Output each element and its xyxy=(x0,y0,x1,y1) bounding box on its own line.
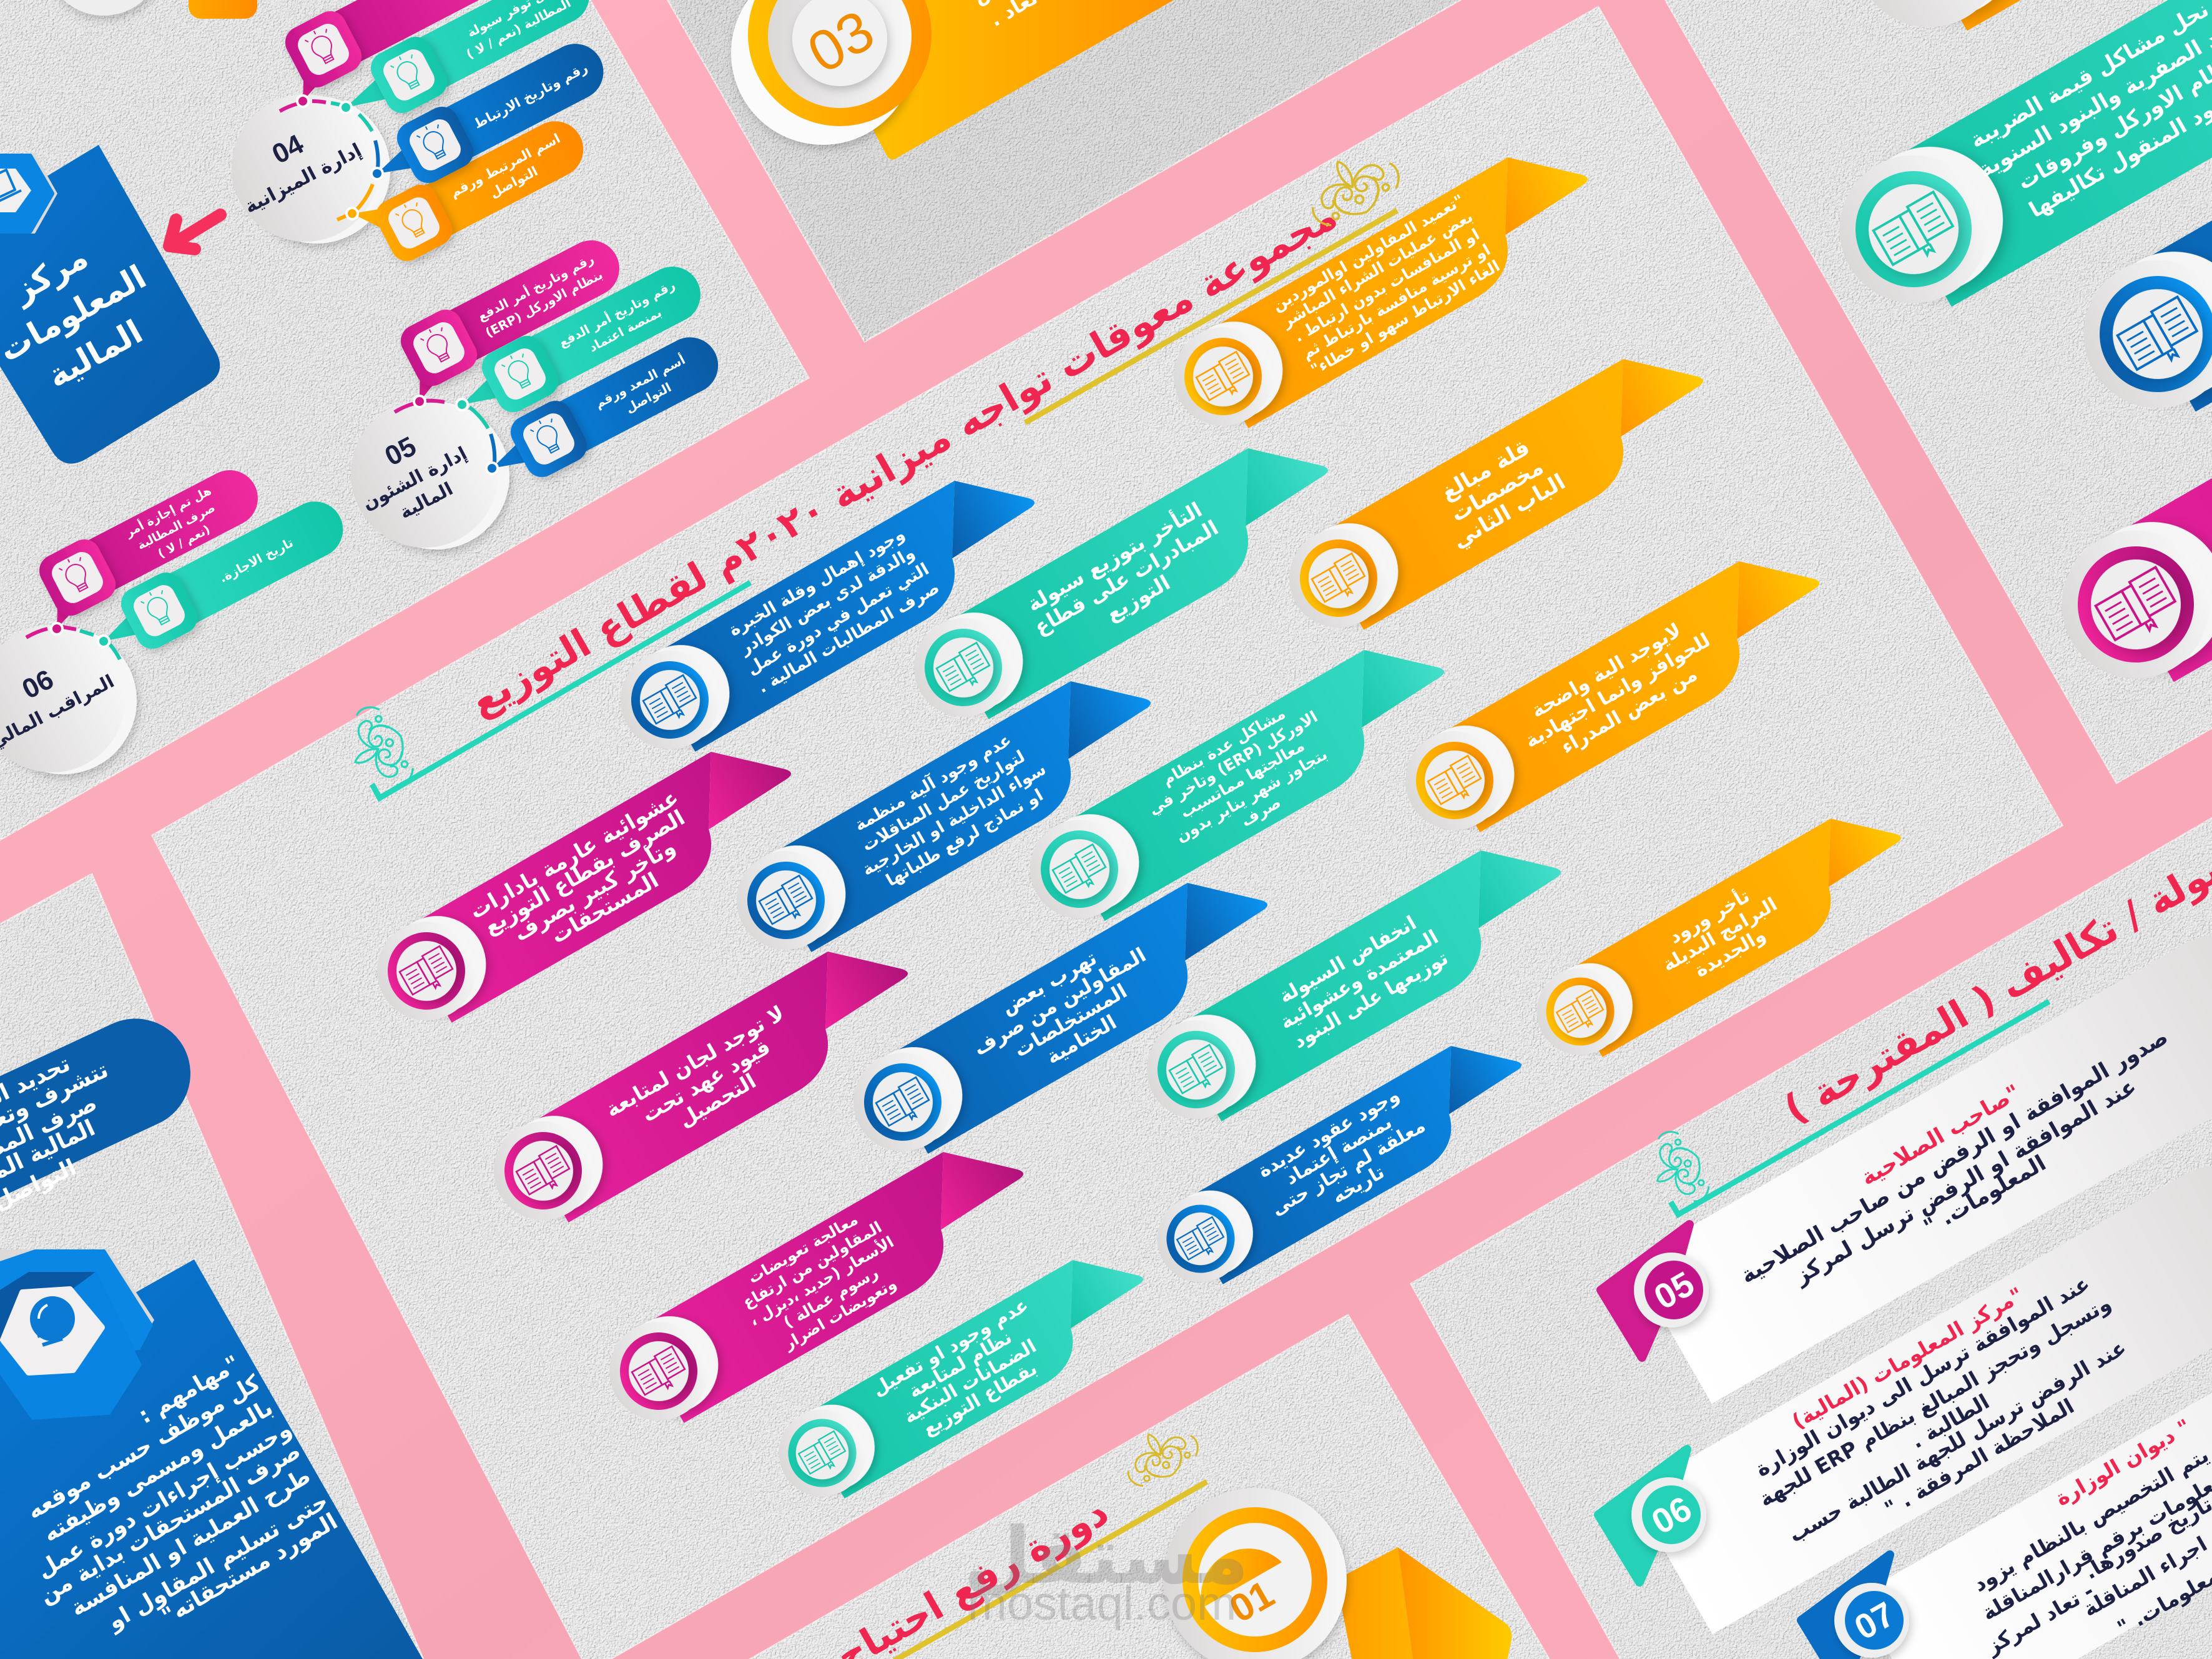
banner: teal 4 small xyxy=(763,1234,1164,1519)
teal underline xyxy=(372,583,750,798)
node label 05: 05 xyxy=(380,431,421,472)
row badge: 05 xyxy=(1648,1264,1701,1317)
row panel xyxy=(1856,1239,2212,1659)
panel: top-right slide xyxy=(1812,0,2212,716)
capsule: orange contact xyxy=(401,112,593,248)
banner: orange 1 xyxy=(1156,127,1611,451)
row text: المعلومات. " xyxy=(1920,1151,2050,1240)
banner text: التوزيع xyxy=(1102,570,1174,626)
capsule: blue definition xyxy=(0,1000,209,1254)
banner text: وتأخر كبير بصرف xyxy=(509,833,680,947)
banner: teal 3 xyxy=(1129,820,1585,1144)
node disc xyxy=(325,375,524,573)
panel: top-left slide, financial information flow xyxy=(0,0,728,798)
banner text: بعض عمليات الشراء المباشر xyxy=(1278,207,1477,332)
box text: tasks: صرف المستحقات بداية من xyxy=(35,1438,305,1609)
banner: orange 4 small xyxy=(1521,792,1922,1077)
banner text: للحوافز وانما اجتهادية xyxy=(1521,629,1714,752)
node label 04 xyxy=(224,106,365,218)
icon: book disc xyxy=(1129,997,1274,1137)
step disc 01: 01 xyxy=(1222,1572,1281,1632)
row text: الطالبة . xyxy=(1907,1389,1993,1453)
node label 05: إدارة الشئون xyxy=(359,442,471,514)
step disc 03 xyxy=(731,0,931,145)
banner text: او المنافسات بدون ارتباط . xyxy=(1290,225,1483,346)
banner: orange 2 xyxy=(1271,329,1727,652)
banner text: قيود عهد تحت xyxy=(637,1035,775,1128)
banner text: معلقة لم تجاز حتى xyxy=(1267,1115,1429,1220)
banner text: التأخر بتوزيع سيولة xyxy=(1022,496,1206,617)
node disc xyxy=(206,69,405,267)
banner: blue 3 xyxy=(835,853,1291,1176)
banner text: الصرف بقطاع التوزيع xyxy=(479,805,689,940)
banner text: الباب الثاني xyxy=(1448,470,1570,554)
icon: book disc xyxy=(602,627,747,767)
box text: tasks: المورد مستحقاته" xyxy=(158,1509,342,1630)
banner text: عدم وجود آلية منظمة xyxy=(850,729,1015,835)
panel: top slide step 03 xyxy=(731,0,1174,160)
banner text: المبادرات على قطاع xyxy=(1030,515,1222,640)
banner text xyxy=(722,523,943,697)
banner: blue 2 xyxy=(719,651,1174,975)
ornament: gold flourish xyxy=(1116,1415,1205,1494)
node 05 financial affairs xyxy=(325,230,728,573)
node progress arcs xyxy=(26,627,120,659)
ornament: teal flourish xyxy=(335,699,422,799)
title: مجموعة معوقات تواجه ميزانية ٢٠٢٠م لقطاع التوزيع xyxy=(462,192,1345,726)
banner text: صرف المطالبات المالية . xyxy=(754,578,943,697)
node progress arcs xyxy=(280,101,378,220)
row 05 xyxy=(1601,904,2212,1404)
banner text: بقطاع التوزيع xyxy=(919,1357,1041,1440)
banner: teal 1 xyxy=(896,418,1352,742)
node disc xyxy=(0,599,151,798)
capsule: pink approval: (نعم / لا ) xyxy=(155,523,212,561)
row panel xyxy=(1631,1135,2212,1634)
banner text: لا توجد لجان لمتابعة xyxy=(601,1000,789,1123)
step disc 01 xyxy=(1163,1488,1347,1659)
banner text: معالجتها مماتسبب xyxy=(1177,736,1308,822)
icon: book disc xyxy=(719,827,863,968)
banner text xyxy=(958,923,1172,1098)
banner: orange 3 xyxy=(1387,531,1843,855)
banner text: تاريخه xyxy=(1329,1161,1389,1208)
banner text: رسوم عمالة ) xyxy=(780,1263,882,1332)
banner text: التحصيل xyxy=(674,1068,760,1132)
capsule: blue linkage xyxy=(422,34,613,170)
capsule: pink approval: هل تم إجازة أمر xyxy=(122,483,214,540)
badges 05 xyxy=(395,304,592,483)
banner text: لايوجد الية واضحة xyxy=(1527,619,1685,722)
banner text: او ترسية منافسة بارتباط ثم xyxy=(1299,240,1493,363)
box heading: مركز xyxy=(5,239,94,311)
step disc 03: 03 xyxy=(797,0,885,86)
banner text xyxy=(465,785,714,978)
banner text: والجديدة xyxy=(1691,924,1769,982)
banner text: وجود إهمال وقلة الخبرة xyxy=(725,524,908,640)
icon: book disc xyxy=(1812,119,2030,330)
capsule: blue preparer: التواصل xyxy=(623,380,674,416)
box heading xyxy=(0,219,175,410)
capsule: teal approval date: تاريخ الاجازة. xyxy=(217,535,295,586)
panel: central slide obstacles xyxy=(335,127,1922,1519)
banner: blue 4 small xyxy=(1141,1020,1543,1304)
node 04 budget management xyxy=(206,0,613,267)
banner text: وجود عقود عديدة xyxy=(1254,1084,1403,1182)
icon: lightbulb hexagon badge xyxy=(0,1249,154,1420)
capsule: pink partial xyxy=(310,0,524,74)
banner: blue xyxy=(2057,4,2212,446)
row badge: 07 xyxy=(1848,1594,1901,1647)
banner text: بتجاوز شهر يناير بدون xyxy=(1173,745,1330,846)
row badge: 06 xyxy=(1645,1489,1698,1542)
icon: book disc xyxy=(476,1098,621,1238)
banner text xyxy=(1018,493,1234,661)
capsule: blue preparer xyxy=(536,328,728,464)
banner text: الضمانات البنكية xyxy=(900,1335,1040,1428)
row text: عند الرفض ترسل للجهة الطالبة حسب xyxy=(1784,1335,2131,1548)
banner text: عدم وجود او تفعيل xyxy=(868,1294,1033,1401)
banner text: صرف xyxy=(1238,793,1284,830)
box text: tasks: حتى تسليم المقاول او xyxy=(102,1488,333,1636)
capsule: pink approval xyxy=(64,460,268,603)
banner text xyxy=(1248,1081,1439,1238)
capsule: teal payment platform: رقم وتاريخ أمر الدفع xyxy=(556,276,677,350)
row text: عند الموافقة ترسل الى ديوان الوزارة xyxy=(1751,1271,2094,1482)
node label 04: 04 xyxy=(267,129,308,170)
row panel xyxy=(1630,904,2212,1404)
banner text xyxy=(727,1200,916,1362)
banner text: او نماذج لرفع طلباتها xyxy=(883,785,1046,890)
box heading: المالية xyxy=(41,313,149,396)
box text: tasks: كل موظف حسب موقعه xyxy=(23,1370,265,1525)
icon: book disc xyxy=(1156,303,1300,444)
watermark: mostaql.com xyxy=(968,1577,1236,1630)
banner text: قلة مبالغ xyxy=(1437,435,1534,506)
banner text xyxy=(1648,874,1791,994)
row text: " ديوان الوزارة xyxy=(2051,1414,2195,1511)
capsule: pink payment order: بنظام الاوركل (ERP) xyxy=(483,267,605,340)
banner text xyxy=(1136,691,1349,868)
banner text: الأسعار (حديد ،ديزل ، xyxy=(745,1232,897,1330)
banner text: معالجة تعويضات xyxy=(745,1210,862,1287)
panel: financial information centre box xyxy=(0,145,220,464)
ribbon fold 01 xyxy=(1398,1547,1512,1659)
banner text: "تعميد المقاولين اوالموردين xyxy=(1269,191,1467,315)
banner: pink xyxy=(2035,275,2212,716)
box text: tasks: بالعمل ومسمى وظيفته xyxy=(39,1395,277,1547)
row text: - تعاد لمركز xyxy=(1981,1578,2098,1659)
row text: صدور الموافقة او الرفض من صاحب الصلاحية xyxy=(1736,1025,2173,1289)
banner text: التي تعمل في دورة عمل xyxy=(744,559,932,679)
box text: tasks: وحسب إجراءات دورة عمل xyxy=(32,1416,297,1583)
banner: pink 1 xyxy=(359,722,815,1045)
row badge xyxy=(1801,1555,1909,1659)
icon: book disc xyxy=(1141,1174,1269,1298)
capsule: orange contact: اسم المرتبط ورقم xyxy=(448,130,563,200)
banner text xyxy=(1265,905,1454,1054)
box text: tasks: "مهامهم : xyxy=(134,1351,244,1429)
banner text xyxy=(868,1294,1062,1452)
node label 05 xyxy=(343,411,482,536)
banner: pink 3 xyxy=(591,1122,1047,1445)
box text: tasks: طرح العملية او المنافسة xyxy=(66,1463,315,1622)
banner text: الختامية xyxy=(1042,1010,1121,1069)
row text: عند الموافقة او الرفض ترسل لمركز xyxy=(1789,1074,2141,1290)
capsule: teal availability xyxy=(396,0,599,100)
icon: book disc xyxy=(896,594,1041,735)
node label 06: 06 xyxy=(17,664,59,705)
banner text: تهرب بعض xyxy=(997,946,1101,1019)
node label 05: المالية xyxy=(396,478,456,523)
icon: book disc xyxy=(1271,505,1416,646)
icon: book disc xyxy=(1521,947,1648,1071)
partial node at top edge xyxy=(44,0,257,19)
capsule: teal payment platform: بمنصة اعتماد xyxy=(586,305,664,355)
banner text: نظام لمتابعة xyxy=(905,1326,1016,1403)
icon: book disc xyxy=(359,898,504,1038)
icon: book disc xyxy=(2035,495,2212,706)
ornament: gold flourish xyxy=(1297,139,1407,235)
icon: book disc xyxy=(835,1029,980,1169)
capsule: pink payment order: رقم وتاريخ أمر الدفع xyxy=(474,250,596,324)
node 06 financial controller xyxy=(0,460,353,798)
icon: book disc xyxy=(2057,224,2212,435)
icon: laptop hexagon badge xyxy=(0,154,57,234)
ornament: teal flourish xyxy=(1638,1125,1717,1214)
capsule: blue linkage: رقم وتاريخ الارتباط xyxy=(471,60,590,132)
banner: orange partial xyxy=(1828,0,2212,65)
banner text: والدقة لدى بعض الكوادر xyxy=(735,543,918,659)
banner text: بمنصة إعتماد xyxy=(1282,1111,1396,1189)
banner text: تأخر ورود xyxy=(1664,884,1754,948)
icon: book disc xyxy=(1012,796,1157,937)
row text: وتسجل وتحجز المبالغ بنظام ERP للجهة xyxy=(1755,1291,2115,1512)
row text: "صاحب الصلاحية xyxy=(1857,1080,2025,1191)
row text: يتم التخصيص بالنظام يزود xyxy=(1969,1442,2212,1597)
banner: pink 2 xyxy=(476,922,931,1245)
icon: book disc xyxy=(1387,707,1532,848)
banner text: المستخلصات xyxy=(1010,979,1131,1062)
capsule: pink approval: صرف المطالبة xyxy=(135,501,217,553)
capsule: pink payment order xyxy=(426,230,629,373)
banner text xyxy=(1269,191,1505,381)
banner text: نحل مشاكل قيمة الضريبة xyxy=(1965,0,2212,154)
row badge xyxy=(1601,1224,1709,1357)
banner text: توزيعها على البنود xyxy=(1289,947,1452,1053)
banner text: البرامج البديلة xyxy=(1659,893,1781,976)
banner text xyxy=(1425,428,1570,554)
capsule: teal payment platform xyxy=(507,257,710,399)
row 06 xyxy=(1598,1135,2212,1634)
banner text xyxy=(837,721,1060,898)
gold underline xyxy=(1025,210,1397,423)
banner: teal tax xyxy=(1812,0,2212,341)
panel: bottom centre slide xyxy=(737,1415,1512,1659)
row badge xyxy=(1598,1449,1706,1582)
badges 06 xyxy=(34,534,203,654)
banner text: سواء الداخلية او الخارجية xyxy=(859,759,1049,880)
banner text: وتعويضات اضرار xyxy=(780,1274,900,1354)
capsule: blue preparer: أسم المعد ورقم xyxy=(592,351,687,411)
banner text: المقاولين من ارتفاع xyxy=(739,1218,885,1312)
panel: left slide tasks xyxy=(0,1000,431,1659)
banner text: المقاولين من صرف xyxy=(969,943,1150,1060)
banner text: عشوائية عارمة بادارات xyxy=(465,785,683,924)
panel: lower-right slide proposed xyxy=(1598,812,2212,1659)
teal underline xyxy=(1671,1002,2049,1214)
banner text: المستحقات xyxy=(547,868,663,949)
banner text: الغاء الارتباط سهو او خطاء" xyxy=(1307,257,1503,380)
banner text: لتواريخ عمل المناقلات xyxy=(858,747,1028,855)
gold underline xyxy=(894,1482,1207,1659)
watermark: مستقل xyxy=(963,1511,1249,1602)
icon: book disc xyxy=(763,1389,890,1512)
banner text: مخصصات xyxy=(1447,455,1548,527)
row text: الملاحظة المرفقة . " xyxy=(1880,1394,2078,1522)
node label 04: إدارة الميزانية xyxy=(241,139,365,218)
row 07 xyxy=(1801,1239,2212,1659)
banner text: من بعض المدراء xyxy=(1557,663,1701,759)
banner: blue 1 xyxy=(602,451,1058,774)
badges 04 xyxy=(280,6,479,267)
arrow: to information centre xyxy=(169,215,220,249)
ribbon body 01 xyxy=(1336,1547,1415,1659)
banner text xyxy=(1510,609,1726,772)
capsule: orange contact: التواصل xyxy=(488,164,540,201)
icon: book disc xyxy=(591,1298,736,1439)
panel: tasks box xyxy=(0,1259,431,1659)
banner: teal 2 xyxy=(1012,620,1468,943)
row text: "مركز المعلومات (المالية) xyxy=(1787,1282,2028,1434)
node progress arcs xyxy=(395,401,494,463)
ribbon body 03 xyxy=(873,0,1174,160)
banner text: المعتمدة وعشوائية xyxy=(1276,926,1442,1034)
banner text xyxy=(601,1000,811,1161)
banner text: الاوركل (ERP) وتاخر في xyxy=(1145,707,1321,819)
banner text: انخفاض السيولة xyxy=(1275,912,1420,1008)
capsule: teal approval date xyxy=(146,492,353,636)
box text: tasks xyxy=(23,1351,342,1636)
banner text: مشاكل عدة بنظام xyxy=(1159,704,1289,789)
